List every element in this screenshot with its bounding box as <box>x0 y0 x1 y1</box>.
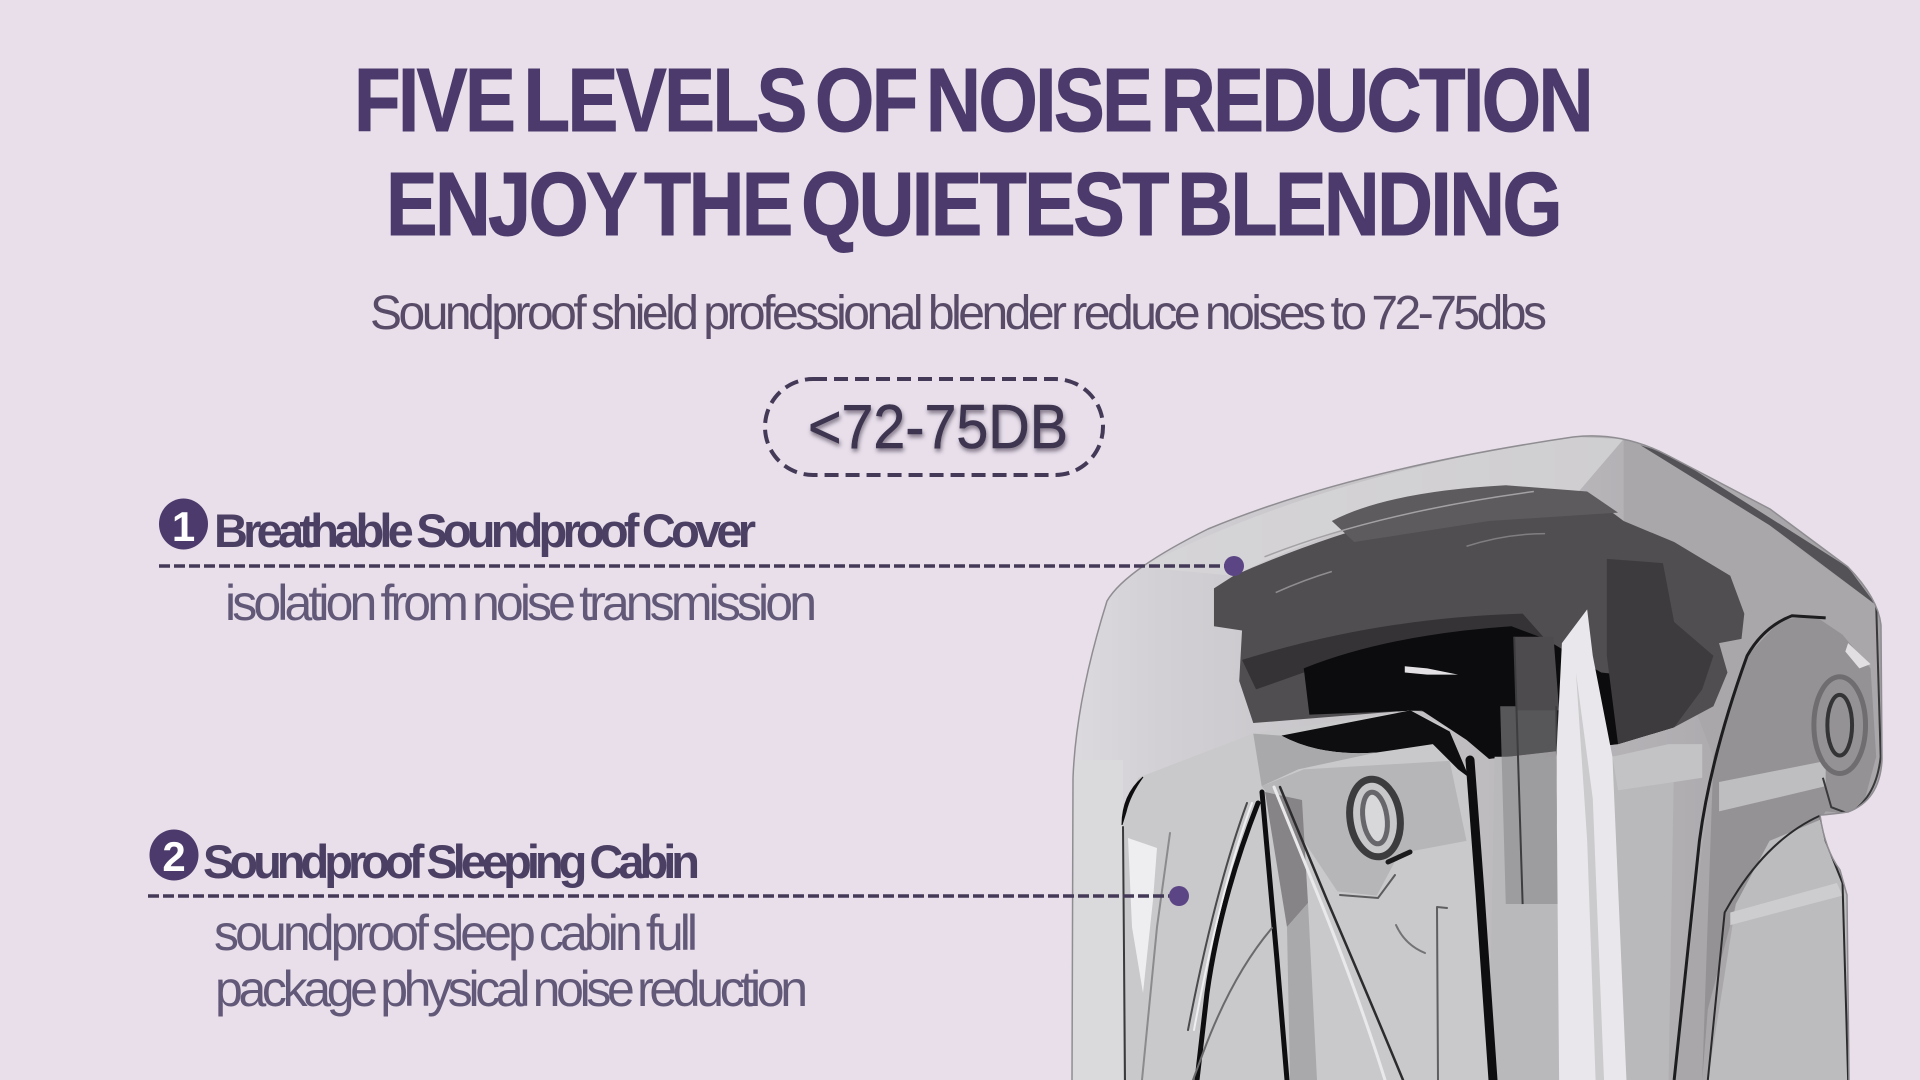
noise level badge <box>765 379 1103 475</box>
right arch panel <box>1702 616 1876 1080</box>
title: ENJOY THE QUIETEST BLENDING <box>386 155 1560 255</box>
leader line 1 <box>159 556 1244 576</box>
number badge 2: 2 <box>162 833 186 880</box>
lower left details <box>1073 760 1493 1080</box>
interior reflections <box>1405 666 1458 675</box>
leader line 2 <box>148 886 1189 906</box>
callout 1: breathable soundproof cover <box>159 498 1244 631</box>
cover outline <box>1072 436 1882 1080</box>
lid cap <box>1332 485 1618 542</box>
dark top rim of cover <box>1640 445 1876 605</box>
lid shadow band <box>1242 614 1545 689</box>
upper panel grey <box>1253 734 1377 786</box>
interior right column <box>1607 559 1713 744</box>
panel corner arc <box>1122 777 1143 825</box>
arched black line <box>1197 803 1258 1080</box>
small dark marks <box>1388 852 1410 862</box>
panel vertical black <box>1262 792 1287 1080</box>
lower right outline <box>1708 816 1848 1080</box>
description 2: soundproof sleep cabin full <box>214 905 698 961</box>
left panel <box>1121 710 1495 1080</box>
cover right side <box>1624 440 1661 536</box>
black band on panel <box>1281 710 1469 778</box>
band lower right <box>1719 761 1826 811</box>
description 2 <box>214 905 808 1017</box>
title: FIVE LEVELS OF NOISE REDUCTION <box>354 51 1591 151</box>
heading 1: Breathable Soundproof Cover <box>214 504 756 557</box>
subtitle: Soundproof shield professional blender reduce noises to 72-75dbs <box>370 287 1547 340</box>
title <box>354 51 1591 255</box>
description 2: package physical noise reduction <box>215 961 808 1017</box>
top cover highlight <box>1241 437 1622 570</box>
left strip <box>1121 824 1123 1080</box>
noise level badge: <72-75DB <box>808 393 1068 462</box>
hinge highlight <box>1845 643 1871 668</box>
diagonal strut <box>1280 787 1403 1080</box>
grey wedge <box>1265 792 1308 927</box>
black side line <box>1470 760 1493 1080</box>
panel ring <box>1345 776 1405 860</box>
blender photo illustration <box>1060 420 1900 1080</box>
centre column <box>1489 753 1674 1080</box>
description 1: isolation from noise transmission <box>225 575 817 631</box>
white highlight <box>1128 838 1157 993</box>
right arch outline <box>1674 616 1826 1080</box>
grey strip in white <box>1576 673 1604 1080</box>
black interior <box>1304 626 1674 759</box>
number badge 1 <box>159 498 208 550</box>
bottom right panel <box>1708 820 1848 1080</box>
hinge outline <box>1823 605 1881 814</box>
hinge bolt right <box>1814 677 1866 774</box>
band across centre <box>1612 744 1702 790</box>
callout 2: soundproof sleeping cabin <box>148 830 1189 1017</box>
lower panel mid <box>1262 761 1467 896</box>
lid <box>1214 489 1744 759</box>
lid highlight <box>1264 492 1534 557</box>
white strip <box>1556 609 1626 1080</box>
heading 2: Soundproof Sleeping Cabin <box>203 835 700 888</box>
number badge 2 <box>150 830 198 880</box>
bracket <box>1500 706 1559 904</box>
number badge 1: 1 <box>172 503 195 550</box>
